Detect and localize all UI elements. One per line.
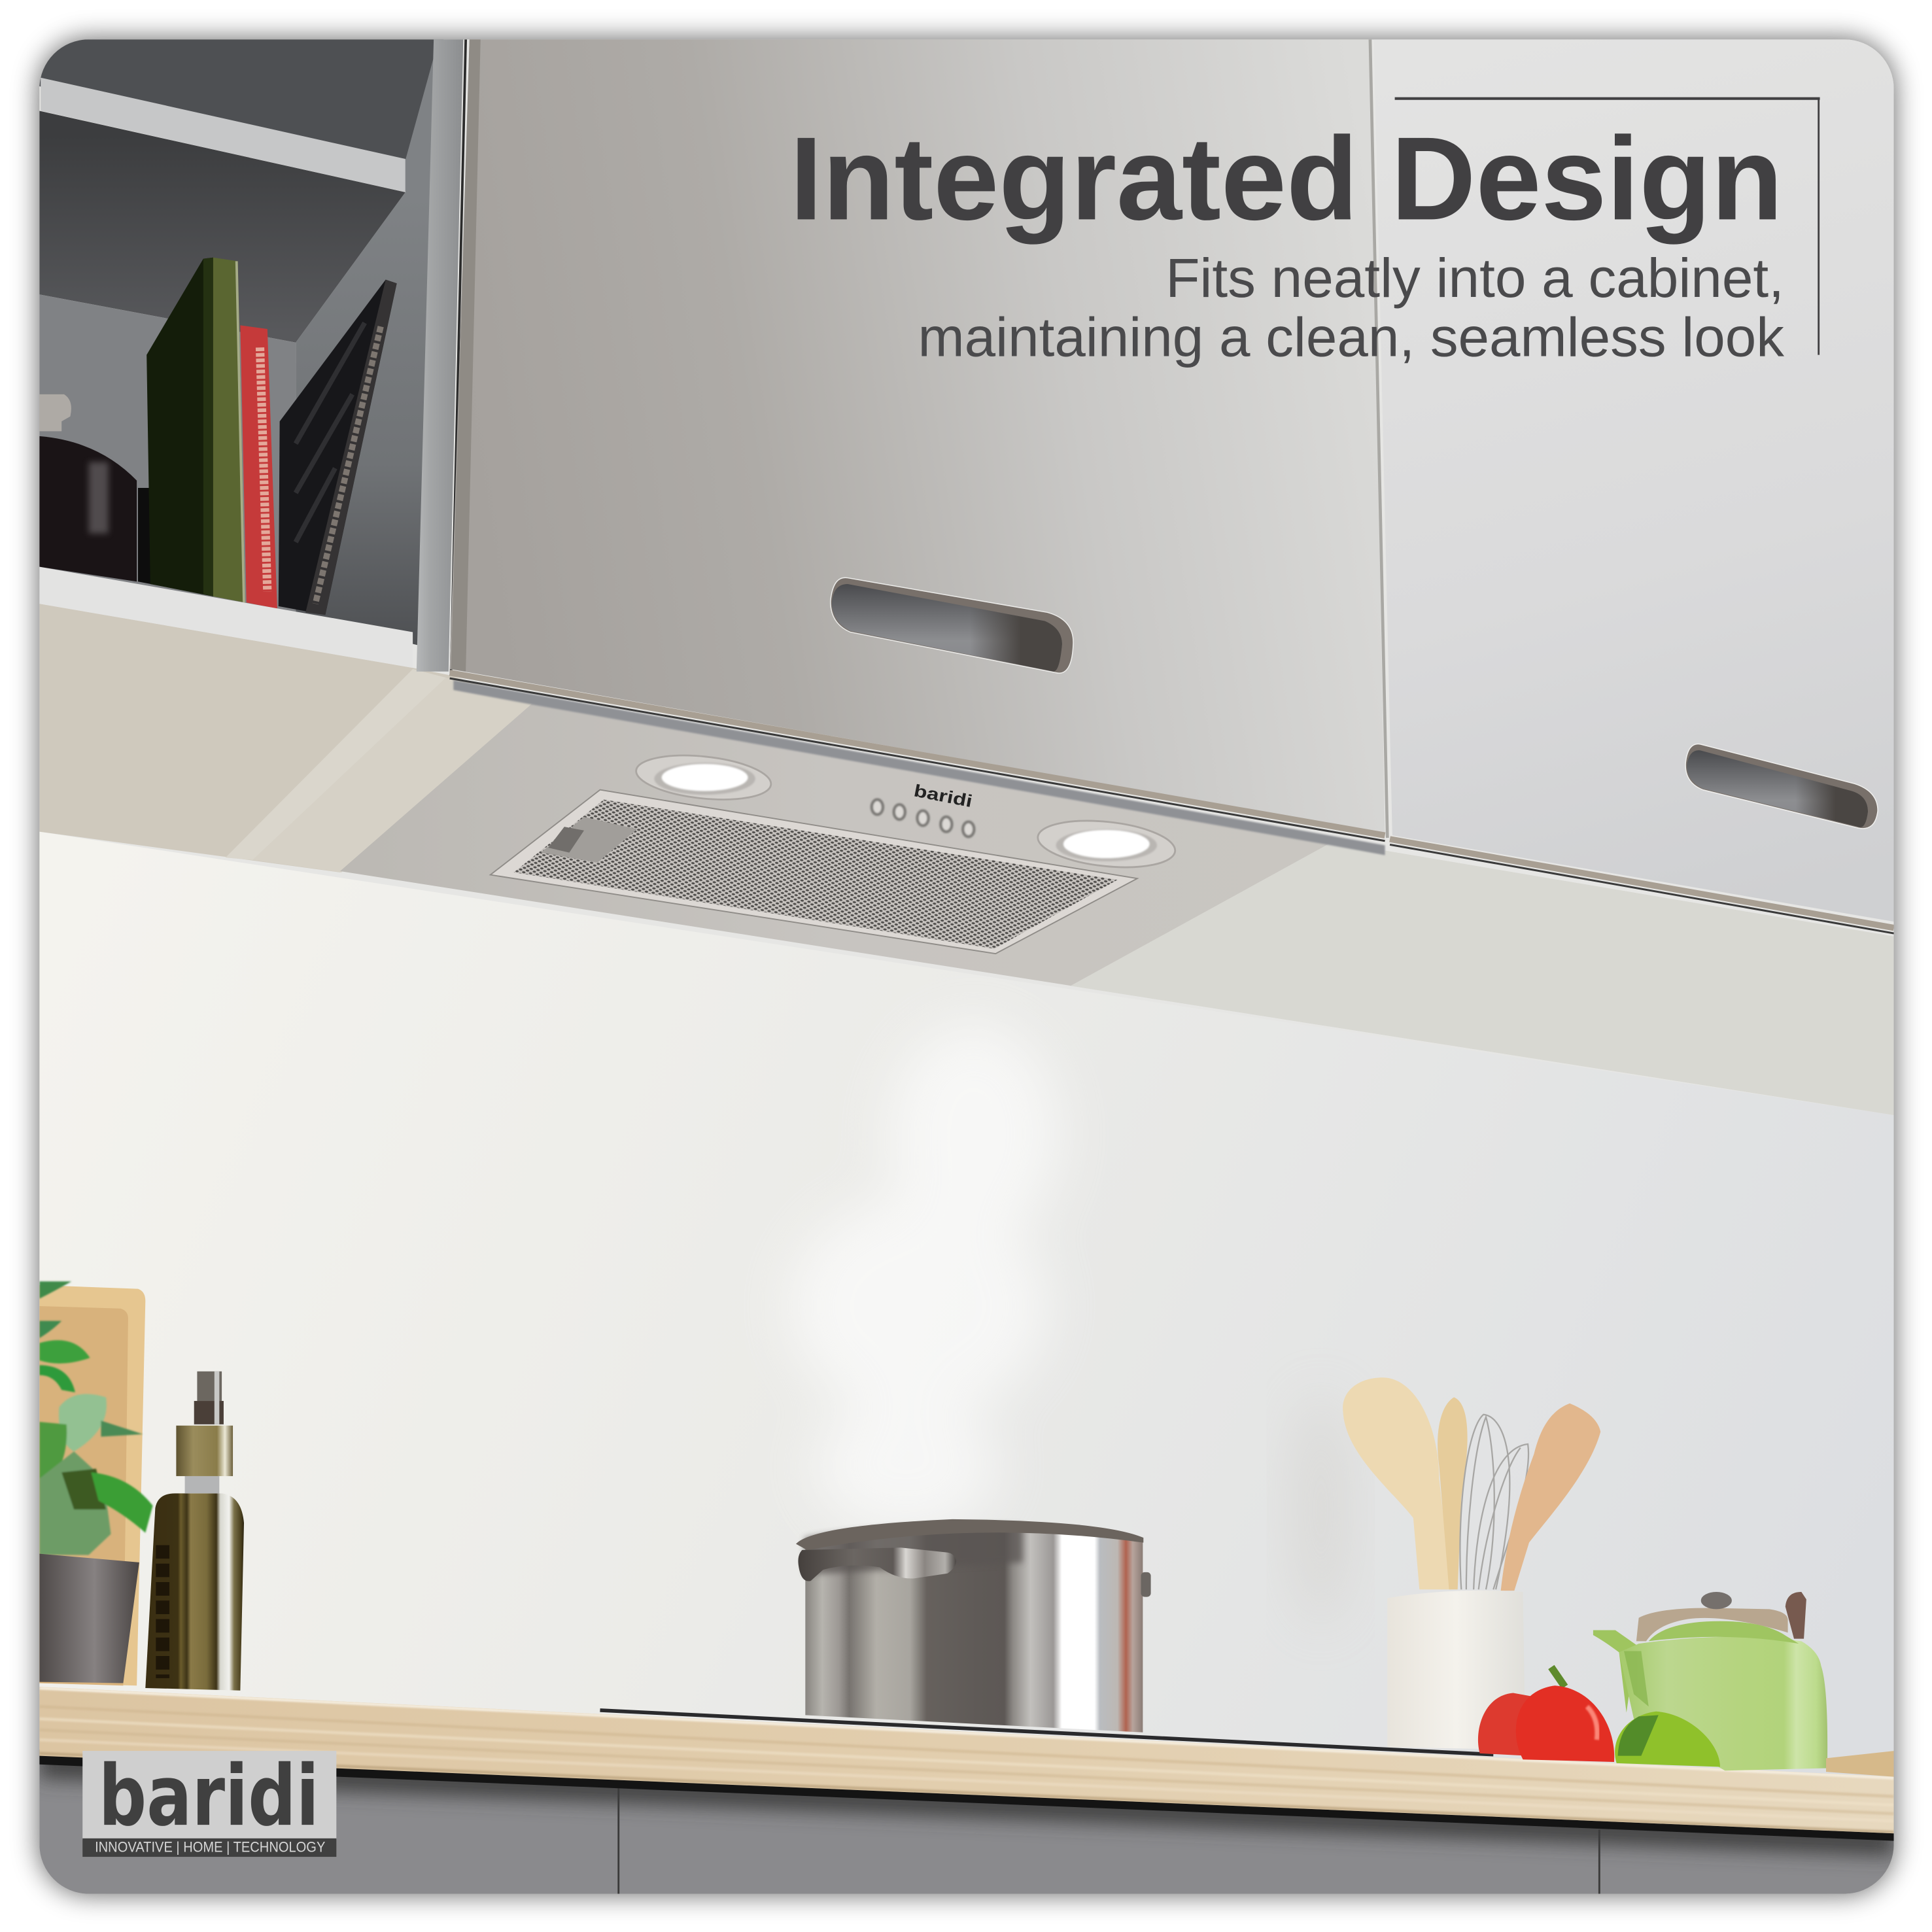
hood control buttons (872, 800, 974, 837)
bottle collar (176, 1426, 233, 1476)
whisk (1460, 1415, 1528, 1589)
filter frame (491, 790, 1137, 954)
cooktop edge (600, 1710, 1493, 1755)
filter latch (541, 817, 637, 863)
dark foliage (61, 1469, 106, 1509)
red book (240, 325, 277, 609)
pepper highlight (1587, 1706, 1597, 1740)
cabinet frame strip (417, 39, 463, 672)
black mug (138, 488, 216, 596)
top shelf board (41, 78, 405, 192)
subtitle line 2: maintaining a clean, seamless look (918, 305, 1785, 368)
grease filter mesh (514, 800, 1118, 949)
white utensil holder (1387, 1591, 1525, 1750)
logo light background (82, 1751, 336, 1840)
cooking pot (796, 1519, 1151, 1733)
light left (634, 750, 773, 805)
utensil shadow on wall (1302, 1445, 1340, 1574)
lower foliage (39, 1451, 111, 1555)
hood panel (340, 702, 1331, 986)
underside seam (252, 678, 536, 872)
shelf back wall (39, 294, 296, 629)
door face (450, 39, 1385, 833)
title: Integrated Design (790, 112, 1783, 245)
board frame (39, 1285, 145, 1685)
wooden spatula (1501, 1404, 1600, 1591)
plant pot (39, 1554, 139, 1683)
black book (279, 280, 397, 615)
small wooden board (1826, 1751, 1894, 1777)
green pepper (1615, 1712, 1720, 1767)
board inner panel (39, 1306, 128, 1685)
subtitle line 1: Fits neatly into a cabinet, (1165, 247, 1784, 309)
wooden counter (39, 1687, 1894, 1833)
oil bottle (145, 1371, 244, 1691)
cabinet fronts (39, 1756, 1894, 1894)
pot handle (798, 1547, 956, 1581)
counter shadow line (39, 1750, 1894, 1841)
leaf (39, 1365, 75, 1392)
pepper front lobe (1516, 1685, 1614, 1762)
bottle cap upper (197, 1371, 222, 1401)
kettle spout (1593, 1630, 1636, 1713)
hood logo: baridi (912, 780, 974, 811)
underside bevel strip (226, 669, 446, 860)
underside right (1069, 840, 1894, 1115)
wall backsplash (39, 832, 1894, 1780)
green kettle (1593, 1592, 1827, 1770)
pot rim (796, 1519, 1143, 1550)
shelf ceiling (39, 111, 405, 343)
subtitle (918, 247, 1785, 368)
light right (1035, 815, 1177, 873)
plant (39, 1281, 153, 1555)
right leaf (91, 1472, 153, 1533)
pot highlight (89, 462, 109, 534)
pale leaf (59, 1394, 107, 1451)
underside left (39, 604, 481, 872)
second spoon (1438, 1397, 1468, 1589)
door left edge shade (451, 39, 481, 672)
pot far handle (1141, 1572, 1151, 1597)
cabinet top shade (39, 1765, 1894, 1842)
pot body (805, 1525, 1143, 1733)
mid leaf (39, 1422, 67, 1491)
logo wordmark: baridi (99, 1748, 319, 1845)
kettle lid (1636, 1608, 1788, 1641)
red bell pepper (1478, 1667, 1614, 1762)
kettle knob (1701, 1592, 1732, 1609)
bottle cap lower (194, 1401, 224, 1424)
door gap (451, 39, 466, 675)
black pot on shelf (39, 436, 137, 581)
bottle neck (185, 1476, 219, 1493)
utensil holder group (1343, 1377, 1600, 1750)
lower shelf board (39, 567, 413, 668)
door edges (450, 39, 1894, 933)
brand logo badge (82, 1748, 336, 1857)
steam rising from pot (789, 1023, 1060, 1534)
door handle slot (831, 578, 1073, 673)
shelf back upper (39, 39, 443, 197)
leaf (39, 1340, 90, 1364)
leaf (39, 1281, 71, 1299)
left open shelving (39, 39, 466, 675)
pot upper shade (804, 1525, 1023, 1575)
counter top (39, 1687, 1894, 1841)
bottle body (145, 1493, 244, 1691)
upper cabinet door right (1374, 39, 1894, 922)
cap highlight (215, 1371, 219, 1424)
wooden spoon (1343, 1377, 1451, 1589)
pot lid knob on shelf (39, 394, 71, 431)
pepper stem (1551, 1667, 1565, 1687)
grey band above hood (453, 680, 1385, 855)
door handle slot (1685, 744, 1878, 829)
logo tagline: INNOVATIVE | HOME | TECHNOLOGY (95, 1839, 325, 1855)
wood grain (39, 1688, 1894, 1832)
upper cabinet door left (450, 39, 1385, 833)
cutting board (39, 1285, 145, 1685)
pepper back lobe (1478, 1693, 1540, 1756)
kettle handle (1785, 1592, 1806, 1639)
door face (1374, 39, 1894, 922)
bottle label marks (159, 1545, 166, 1678)
logo dark strip (82, 1838, 336, 1857)
cabinet seams (618, 1787, 619, 1894)
kettle body (1619, 1637, 1827, 1770)
leaf (39, 1321, 61, 1338)
corner bracket line (1395, 99, 1820, 355)
kettle inner lid (1649, 1621, 1799, 1644)
green book (147, 258, 245, 602)
shelf side wall (296, 39, 439, 647)
cabinet underside (39, 604, 1894, 1115)
hood steel plate (340, 702, 1331, 986)
kettle dark spout shade (1624, 1651, 1649, 1706)
sharp leaf (101, 1421, 143, 1437)
lower base cabinets (39, 1756, 1894, 1894)
